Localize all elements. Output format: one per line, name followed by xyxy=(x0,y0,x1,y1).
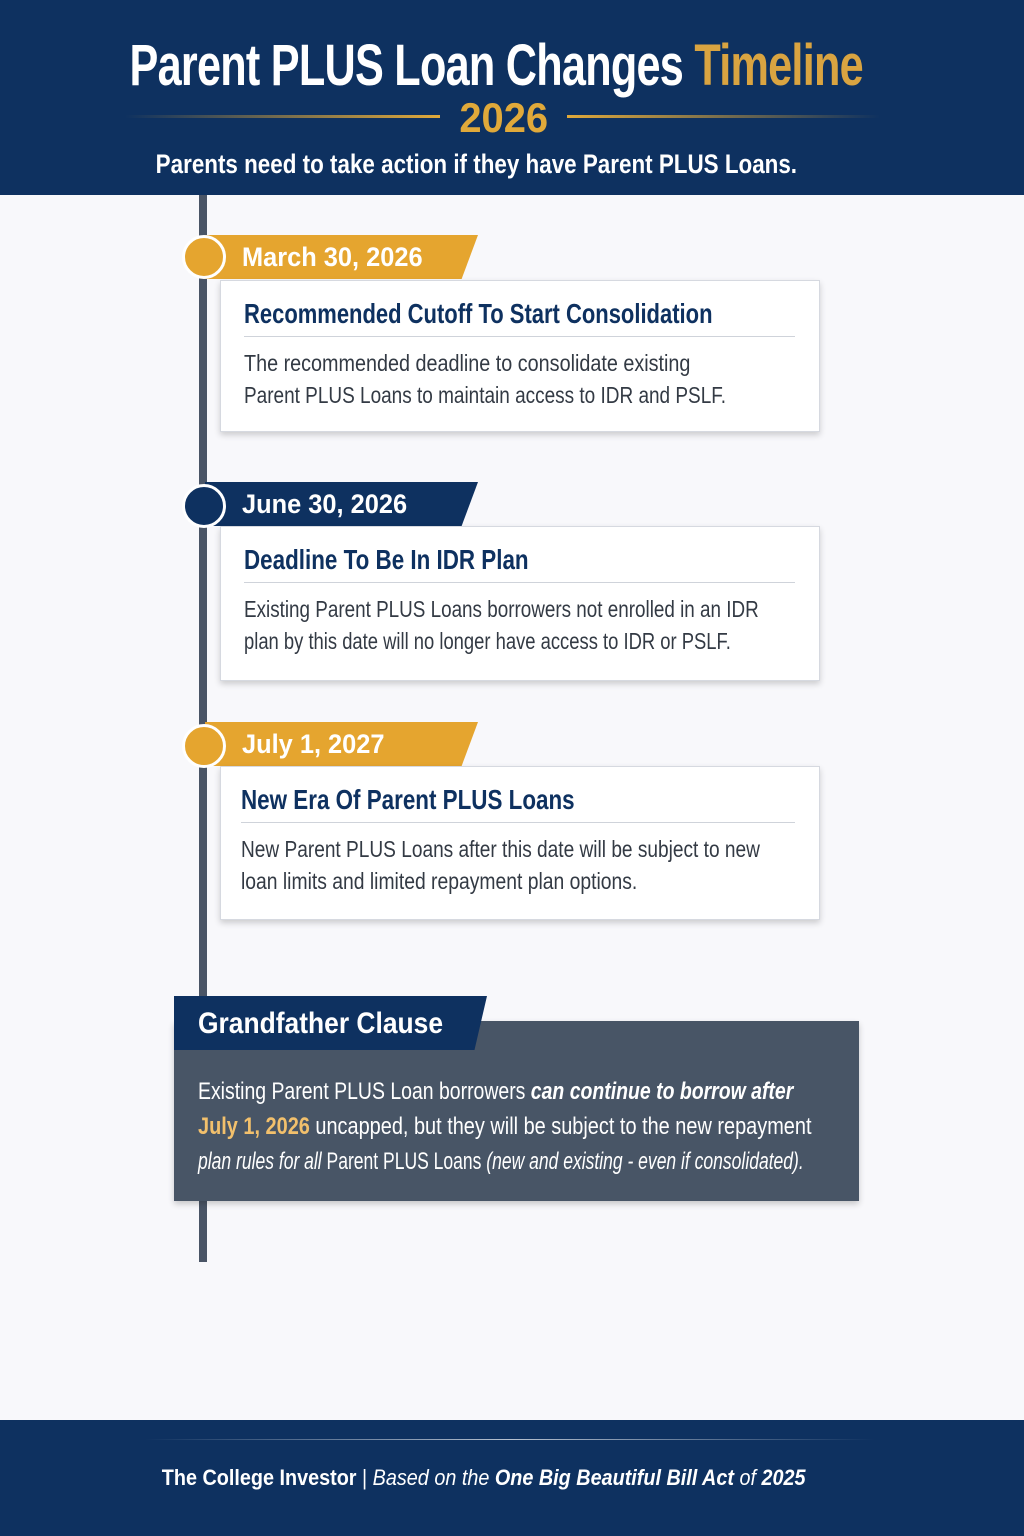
card 3: New Era Of Parent PLUS Loans xyxy=(241,784,575,815)
footer xyxy=(0,1420,1024,1536)
card 2: Existing Parent PLUS Loans borrowers not enrolled in an IDR xyxy=(244,596,759,622)
timeline line xyxy=(199,195,207,1262)
grandfather text: July 1, 2026 uncapped, but they will be subject to the new repayment xyxy=(198,1113,811,1140)
title: Parent PLUS Loan Changes Timeline xyxy=(129,33,863,98)
date banner 1 xyxy=(205,235,478,279)
grandfather heading tab: Grandfather Clause xyxy=(198,1007,443,1040)
subtitle: Parents need to take action if they have Parent PLUS Loans. xyxy=(155,149,797,179)
circle marker 2 xyxy=(182,484,226,528)
milestone 1 xyxy=(185,235,822,438)
card 2: plan by this date will no longer have access to IDR or PSLF. xyxy=(244,628,731,654)
footer rule xyxy=(145,1439,875,1440)
card 2: Deadline To Be In IDR Plan xyxy=(244,544,529,575)
card 1: Parent PLUS Loans to maintain access to IDR and PSLF. xyxy=(244,382,726,408)
date banner 3 xyxy=(205,722,478,766)
date banner 3: July 1, 2027 xyxy=(242,729,385,759)
grandfather heading tab xyxy=(174,996,487,1050)
date banner 2: June 30, 2026 xyxy=(242,489,407,519)
date banner 1: March 30, 2026 xyxy=(242,242,423,272)
grandfather text xyxy=(198,1078,812,1175)
card 2 xyxy=(220,526,820,681)
milestone 3 xyxy=(185,722,822,926)
grandfather text: plan rules for all Parent PLUS Loans (new and existing - even if consolidated). xyxy=(198,1148,804,1175)
date banner 2 xyxy=(205,482,478,526)
panel: grandfather clause xyxy=(171,996,862,1207)
circle marker 1 xyxy=(182,235,226,279)
header band xyxy=(0,0,1024,195)
year: 2026 xyxy=(460,94,548,141)
milestone 2 xyxy=(185,482,822,686)
footer credit: The College Investor | Based on the One Big Beautiful Bill Act of 2025 xyxy=(162,1465,806,1490)
card 1 xyxy=(220,280,820,432)
grandfather box xyxy=(174,1021,859,1201)
card 3 xyxy=(220,766,820,920)
circle marker 3 xyxy=(182,724,226,768)
card 3: New Parent PLUS Loans after this date will be subject to new xyxy=(241,836,760,862)
left gold rule xyxy=(125,115,440,118)
grandfather text: Existing Parent PLUS Loan borrowers can continue to borrow after xyxy=(198,1078,793,1105)
card 3: loan limits and limited repayment plan options. xyxy=(241,868,637,894)
card 1: The recommended deadline to consolidate existing xyxy=(244,350,690,376)
card 1: Recommended Cutoff To Start Consolidation xyxy=(244,298,712,329)
right gold rule xyxy=(567,115,880,118)
